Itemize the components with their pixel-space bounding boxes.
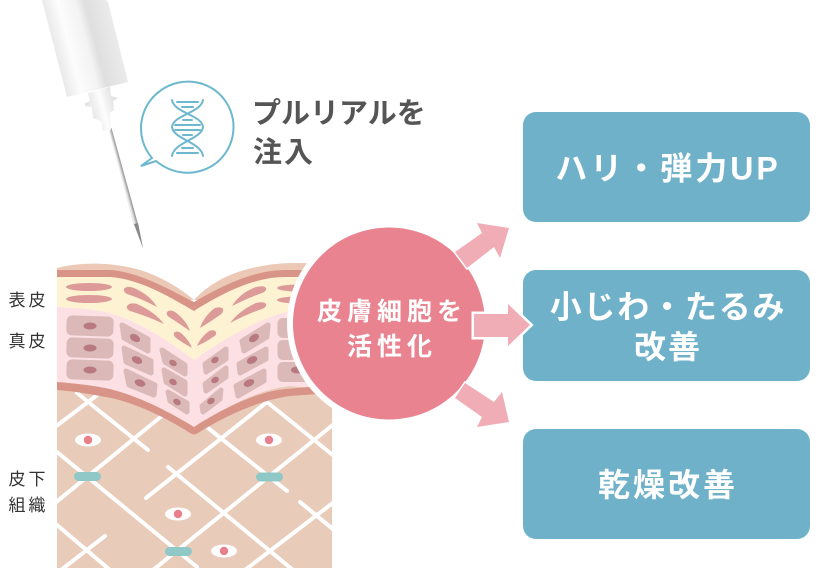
skin layer labels xyxy=(8,291,48,515)
skin layer labels: 組織 xyxy=(8,496,48,515)
heading: injection text xyxy=(252,97,426,169)
skin layer labels: 表皮 xyxy=(8,291,48,310)
heading: injection text: 注入 xyxy=(253,136,315,169)
epidermis cells xyxy=(66,283,319,348)
central circle: skin cell activation: 皮膚細胞を xyxy=(317,298,467,326)
result box: wrinkles and sagging: 改善 xyxy=(634,329,702,365)
subcutaneous tissue xyxy=(55,380,334,570)
dermis cells xyxy=(69,318,322,412)
epidermis layer xyxy=(57,276,332,360)
result box: wrinkles and sagging xyxy=(523,270,810,381)
upper band xyxy=(57,270,332,311)
skin diagram xyxy=(55,263,334,570)
cell nuclei xyxy=(84,322,304,407)
result box: dryness: 乾燥改善 xyxy=(598,467,738,503)
fat cells xyxy=(75,434,282,558)
arrow: to wrinkles xyxy=(474,304,530,346)
result box: wrinkles and sagging: 小じわ・たるみ xyxy=(550,289,786,325)
central circle: skin cell activation xyxy=(287,222,491,426)
icon: DNA helix xyxy=(172,100,203,156)
syringe xyxy=(42,0,143,248)
result box: firmness xyxy=(523,112,810,222)
dermis layer xyxy=(57,307,332,430)
arrow: to firmness xyxy=(455,223,509,268)
speech bubble: DNA icon xyxy=(141,82,234,173)
result box: firmness: ハリ・弾力UP xyxy=(555,150,781,186)
result box: dryness xyxy=(523,429,810,539)
arrow: to dryness xyxy=(455,383,509,427)
skin layer labels: 皮下 xyxy=(8,470,48,489)
heading: injection text: プルリアルを xyxy=(252,97,426,130)
central circle: skin cell activation: 活性化 xyxy=(347,333,437,361)
lower band xyxy=(57,382,332,434)
top surface layer xyxy=(57,263,332,300)
blood vessels xyxy=(74,472,283,556)
skin layer labels: 真皮 xyxy=(8,332,48,351)
